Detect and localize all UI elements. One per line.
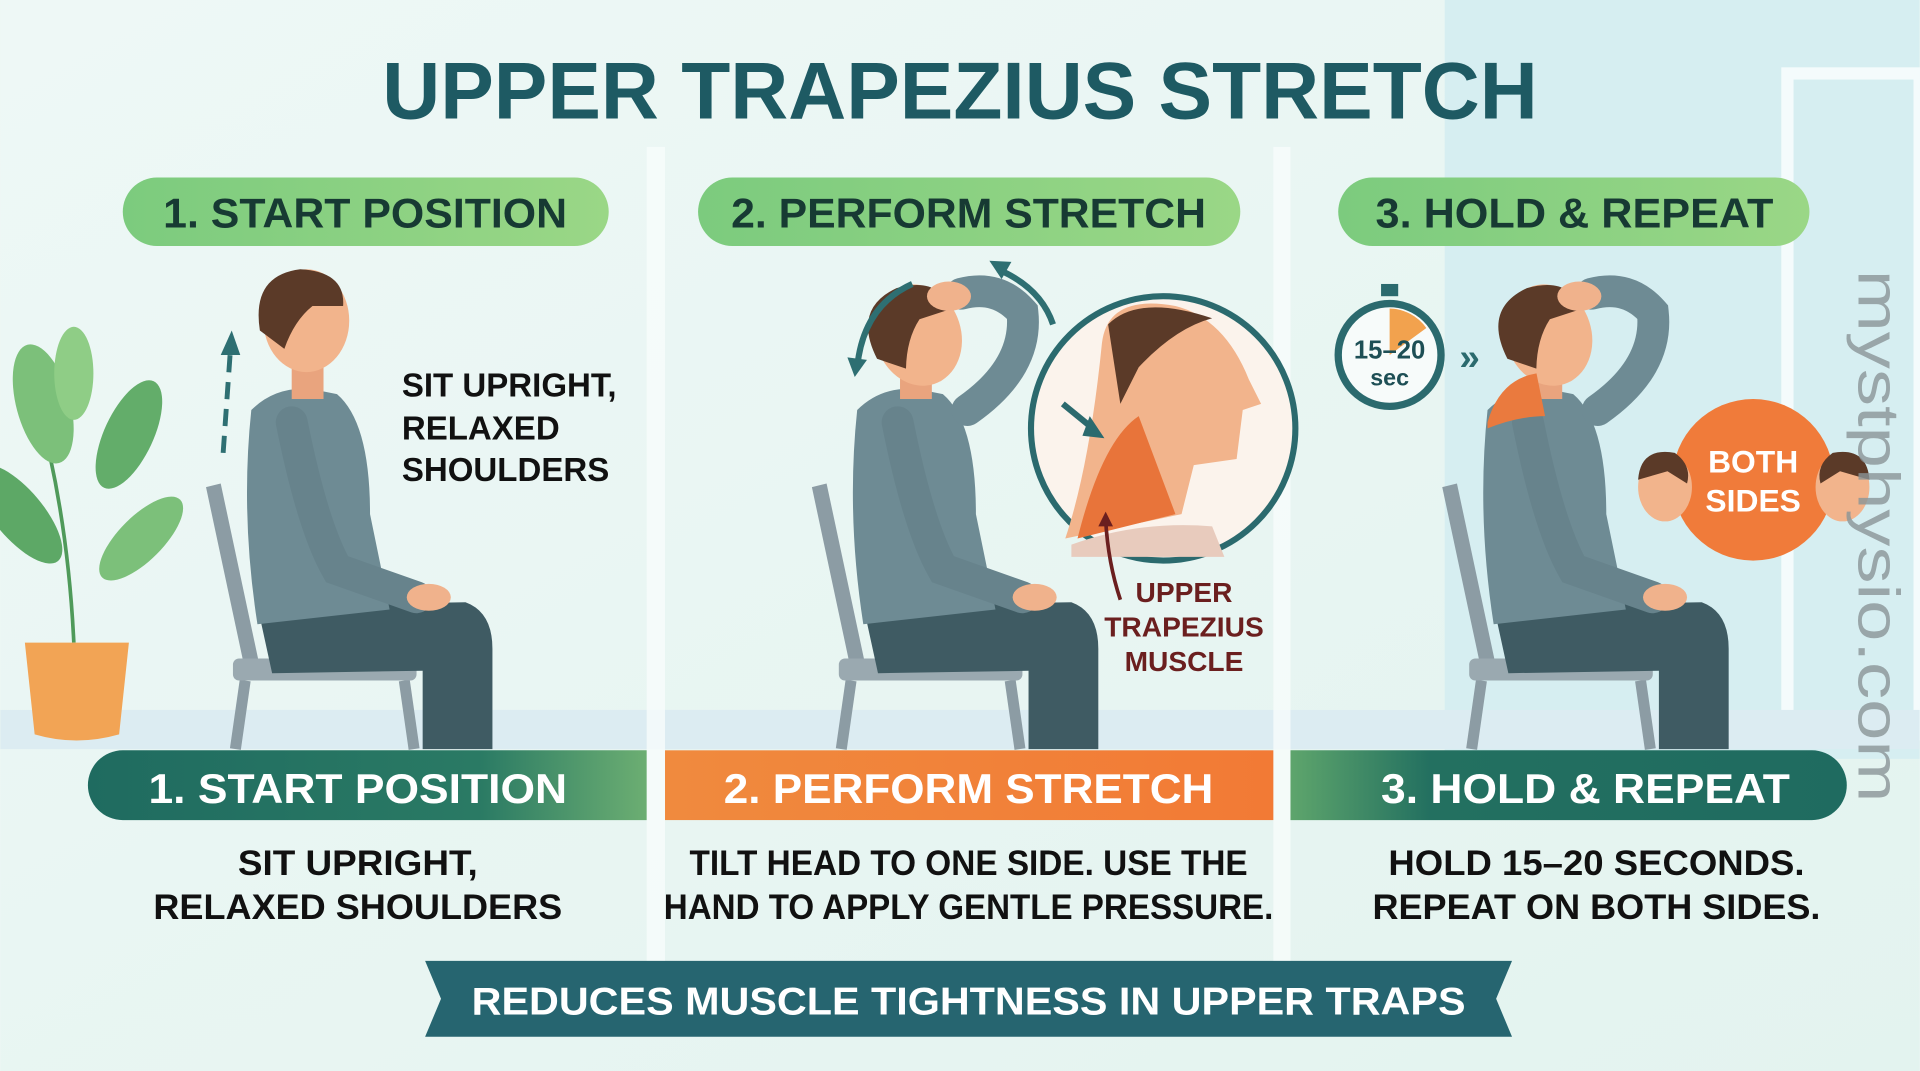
figure: hold and repeat bbox=[1442, 273, 1729, 749]
text: step 3 description: REPEAT ON BOTH SIDES. bbox=[1372, 887, 1820, 927]
watermark: mystphysio.com bbox=[1845, 270, 1910, 802]
arrow: upright bbox=[221, 330, 240, 453]
text: step 3 description: HOLD 15–20 SECONDS. bbox=[1388, 843, 1805, 883]
text: step 3 description bbox=[1372, 843, 1820, 927]
icon: stopwatch: sec bbox=[1370, 365, 1409, 391]
band: step 3: 3. HOLD & REPEAT bbox=[1381, 765, 1790, 812]
label: upper trapezius muscle: UPPER bbox=[1136, 577, 1232, 608]
band: step 2: 2. PERFORM STRETCH bbox=[724, 765, 1213, 812]
badge: both sides: BOTH bbox=[1708, 443, 1798, 479]
text: step 1 description: RELAXED SHOULDERS bbox=[153, 887, 562, 927]
title: UPPER TRAPEZIUS STRETCH bbox=[382, 47, 1538, 137]
icon: stopwatch: 15–20 bbox=[1354, 337, 1425, 365]
text: sit upright: SIT UPRIGHT, bbox=[402, 368, 617, 405]
text: step 1 description bbox=[153, 843, 562, 927]
figure: perform stretch bbox=[812, 261, 1098, 749]
text: step 2 description bbox=[664, 843, 1273, 927]
label: upper trapezius muscle: TRAPEZIUS bbox=[1104, 611, 1264, 642]
label: upper trapezius muscle: MUSCLE bbox=[1125, 646, 1243, 677]
banner: benefit: REDUCES MUSCLE TIGHTNESS IN UPPER TRAPS bbox=[472, 981, 1466, 1024]
badge: both sides bbox=[1638, 399, 1869, 561]
band: step 2 bbox=[665, 750, 1273, 820]
text: sit upright bbox=[402, 368, 617, 489]
pill: step 1: 1. START POSITION bbox=[163, 190, 567, 237]
band: step 1: 1. START POSITION bbox=[148, 765, 567, 812]
figure: start position bbox=[206, 269, 492, 749]
label: upper trapezius muscle bbox=[1098, 512, 1264, 677]
text: step 2 description: TILT HEAD TO ONE SIDE. USE THE bbox=[689, 843, 1248, 883]
pill: step 2: 2. PERFORM STRETCH bbox=[731, 190, 1206, 237]
text: step 1 description: SIT UPRIGHT, bbox=[238, 843, 478, 883]
icon: stopwatch bbox=[1338, 284, 1480, 406]
icon: plant bbox=[0, 327, 196, 741]
pill: step 3 bbox=[1338, 177, 1809, 246]
pill: step 2 bbox=[698, 177, 1240, 246]
pill: step 3: 3. HOLD & REPEAT bbox=[1376, 190, 1773, 237]
inset: neck muscle bbox=[1031, 296, 1295, 561]
pill: step 1 bbox=[123, 177, 609, 246]
band: step 1 bbox=[88, 750, 647, 820]
text: sit upright: RELAXED bbox=[402, 410, 560, 447]
icon: stopwatch: » bbox=[1459, 337, 1480, 378]
band: step 3 bbox=[1290, 750, 1847, 820]
banner: benefit bbox=[425, 961, 1512, 1037]
text: step 2 description: HAND TO APPLY GENTLE PRESSURE. bbox=[664, 887, 1273, 927]
badge: both sides: SIDES bbox=[1705, 483, 1801, 519]
text: sit upright: SHOULDERS bbox=[402, 452, 609, 489]
